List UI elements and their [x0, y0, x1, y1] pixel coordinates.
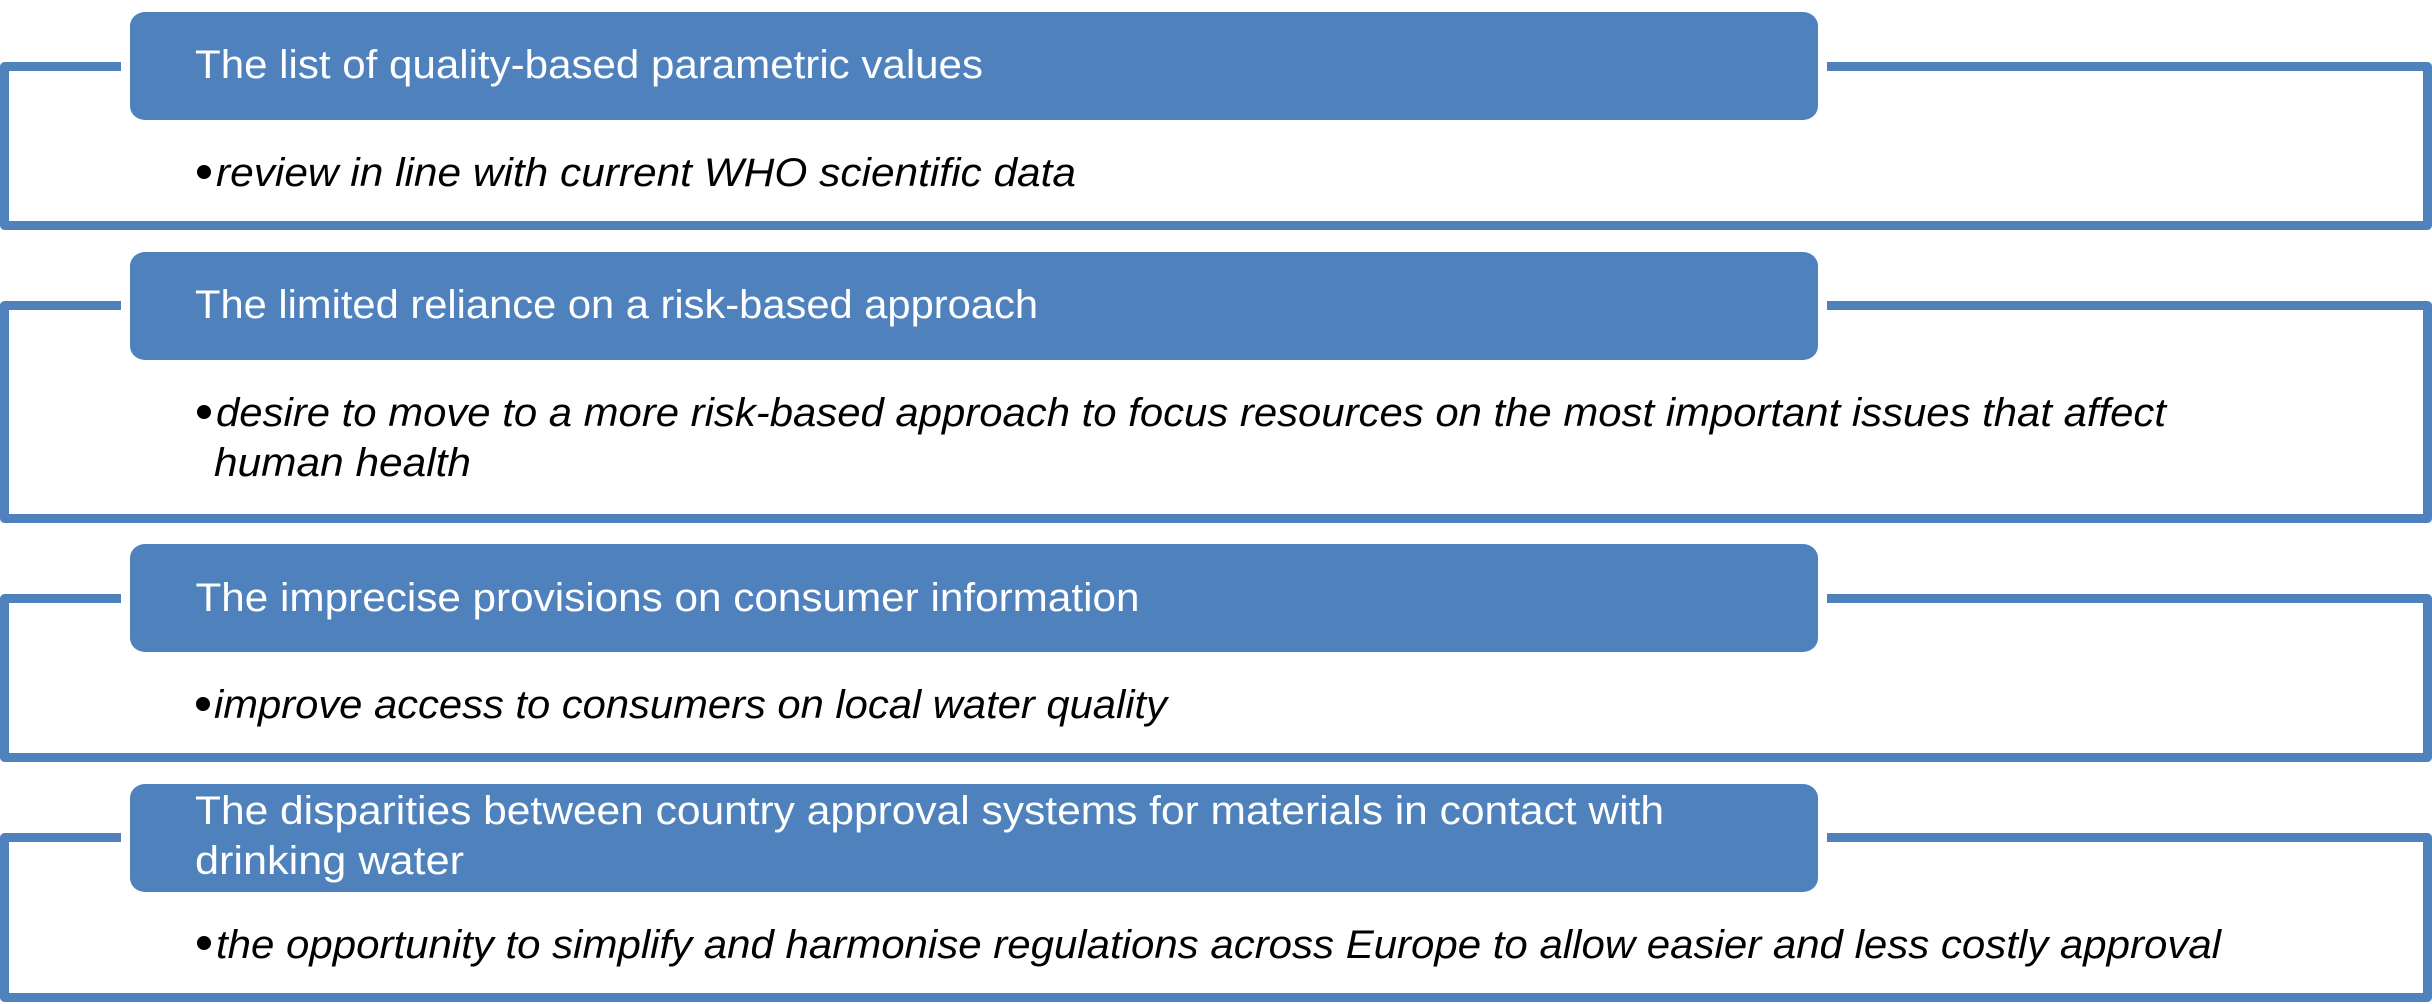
body text continuation: human health	[214, 441, 471, 485]
body text: the opportunity to simplify and harmonise regulations across Europe to allow easier and less costly approval	[216, 923, 2222, 967]
heading: The list of quality-based parametric values	[195, 43, 983, 87]
bullet	[196, 697, 210, 711]
panel: consumer information	[4, 544, 2428, 758]
bullet	[197, 165, 211, 179]
panel frame	[4, 598, 2428, 758]
panel frame	[4, 306, 2428, 518]
heading continuation: drinking water	[195, 839, 464, 883]
panel: risk-based approach	[4, 252, 2428, 518]
panel: quality-based parametric values	[4, 12, 2428, 226]
body text: desire to move to a more risk-based approach to focus resources on the most important issues that affect	[216, 391, 2168, 435]
heading: The limited reliance on a risk-based approach	[195, 283, 1038, 327]
heading: The disparities between country approval systems for materials in contact with	[195, 789, 1664, 833]
body text: improve access to consumers on local water quality	[214, 683, 1170, 727]
bullet	[197, 936, 211, 950]
heading bar	[130, 252, 1818, 360]
panel frame	[4, 838, 2428, 998]
panel: material approval systems	[4, 784, 2428, 998]
heading bar	[130, 544, 1818, 652]
bullet	[197, 405, 211, 419]
body text: review in line with current WHO scientific data	[216, 151, 1076, 195]
panel frame	[4, 66, 2428, 226]
heading: The imprecise provisions on consumer information	[196, 576, 1140, 620]
heading bar	[130, 784, 1818, 892]
heading bar	[130, 12, 1818, 120]
